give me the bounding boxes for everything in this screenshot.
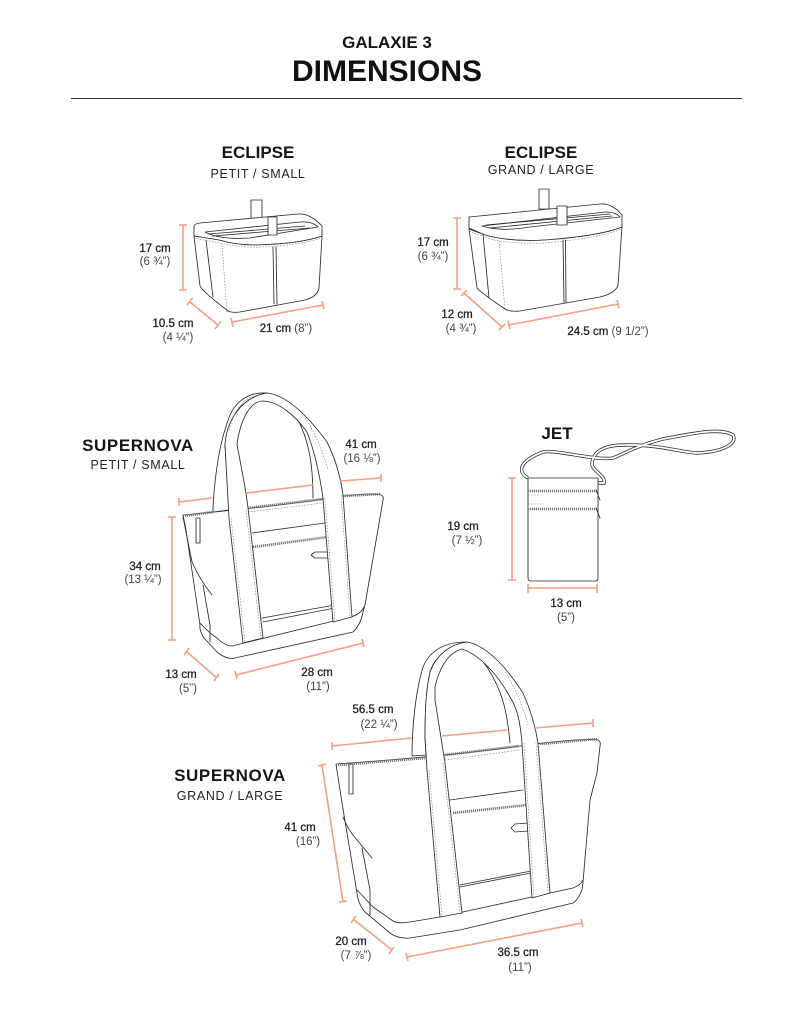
dimension: width 24.5 cm: 24.5 cm (9 1/2”): [567, 326, 649, 338]
dimension: depth 13 cm: [165, 648, 219, 695]
illustration: Supernova small bag: [183, 393, 383, 658]
dimension: height 41 cm: [284, 764, 347, 902]
dimension: top width 41 cm: (16 ⅛”): [343, 453, 381, 465]
dimension: height 34 cm: (13 ¼”): [124, 574, 162, 586]
dimension: width 13 cm: 13 cm: [550, 598, 582, 610]
heading: Supernova small: SUPERNOVA: [82, 436, 194, 455]
dimension: height 19 cm: (7 ½”): [452, 535, 483, 547]
heading: Eclipse small: ECLIPSE: [222, 143, 294, 162]
heading: Eclipse large: GRAND / LARGE: [488, 163, 594, 177]
dimension: height 34 cm: 34 cm: [129, 561, 161, 573]
dimension: top width 56.5 cm: [332, 704, 593, 750]
dimension: width 21 cm: 21 cm (8”): [260, 323, 312, 335]
heading: Eclipse small: [210, 143, 306, 181]
dimension: width 13 cm: (5”): [557, 612, 575, 624]
heading: Jet: JET: [541, 424, 573, 443]
dimension: depth 20 cm: [335, 916, 394, 962]
dimension: height 17 cm: 17 cm: [417, 237, 449, 249]
title: [292, 33, 482, 88]
panel: Supernova small: [82, 393, 383, 695]
panel: Jet: [447, 424, 734, 624]
heading: Eclipse large: [488, 143, 594, 177]
dimension: height 34 cm: [124, 517, 176, 640]
dimension: depth 12 cm: (4 ¾”): [446, 323, 477, 335]
dimension: depth 10.5 cm: (4 ¼”): [163, 332, 194, 344]
dimension: depth 13 cm: 13 cm: [165, 669, 197, 681]
dimension: depth 12 cm: [441, 290, 505, 335]
dimension: width 36.5 cm: (11”): [508, 962, 532, 974]
illustration: Jet pouch: [522, 431, 734, 581]
panel: Supernova large: [174, 642, 600, 974]
dimension: depth 20 cm: (7 ⅞”): [341, 950, 372, 962]
dimension: top width 56.5 cm: (22 ¼”): [360, 719, 398, 731]
dimension: height 17 cm: [139, 225, 187, 290]
dimension: width 24.5 cm: [508, 300, 649, 338]
title: GALAXIE 3: [342, 33, 432, 52]
dimension: width 21 cm: [231, 301, 324, 335]
dimension: depth 10.5 cm: [153, 298, 221, 344]
dimension: depth 13 cm: (5”): [179, 683, 197, 695]
dimension: width 36.5 cm: 36.5 cm: [498, 947, 538, 959]
heading: Eclipse small: PETIT / SMALL: [210, 167, 306, 181]
dimension: top width 41 cm: 41 cm: [345, 439, 377, 451]
heading: Supernova small: PETIT / SMALL: [90, 458, 186, 472]
dimension: width 36.5 cm: [406, 919, 583, 974]
illustration: Eclipse large bag: [469, 189, 622, 311]
dimension: width 28 cm: 28 cm: [301, 667, 333, 679]
dimension: width 13 cm: [528, 584, 597, 624]
heading: Supernova large: SUPERNOVA: [174, 766, 286, 785]
dimension: depth 10.5 cm: 10.5 cm: [153, 318, 193, 330]
illustration: Supernova large bag: [336, 642, 600, 938]
title: DIMENSIONS: [292, 55, 482, 88]
dimension: top width 56.5 cm: 56.5 cm: [353, 704, 393, 716]
dimension: top width 41 cm: [179, 439, 381, 506]
heading: Supernova large: [174, 766, 286, 803]
dimension: height 17 cm: 17 cm: [139, 243, 171, 255]
heading: Eclipse large: ECLIPSE: [505, 143, 577, 162]
heading: Supernova small: [82, 436, 194, 472]
dimension: height 17 cm: (6 ¾”): [418, 251, 449, 263]
heading: Supernova large: GRAND / LARGE: [177, 789, 283, 803]
dimension: height 41 cm: (16”): [296, 836, 320, 848]
dimension: width 28 cm: [235, 639, 364, 693]
dimension: height 41 cm: 41 cm: [284, 822, 316, 834]
dimension: depth 12 cm: 12 cm: [441, 309, 473, 321]
panel: Eclipse small: [139, 143, 324, 344]
dimension: height 17 cm: (6 ¾”): [140, 256, 171, 268]
dimension: height 19 cm: 19 cm: [447, 521, 479, 533]
dimension: height 19 cm: [447, 478, 516, 580]
panel: Eclipse large: [417, 143, 649, 338]
dimension: depth 20 cm: 20 cm: [335, 936, 367, 948]
illustration: Eclipse small bag: [194, 200, 322, 312]
dimension: height 17 cm: [417, 218, 461, 289]
dimension: width 28 cm: (11”): [306, 681, 330, 693]
